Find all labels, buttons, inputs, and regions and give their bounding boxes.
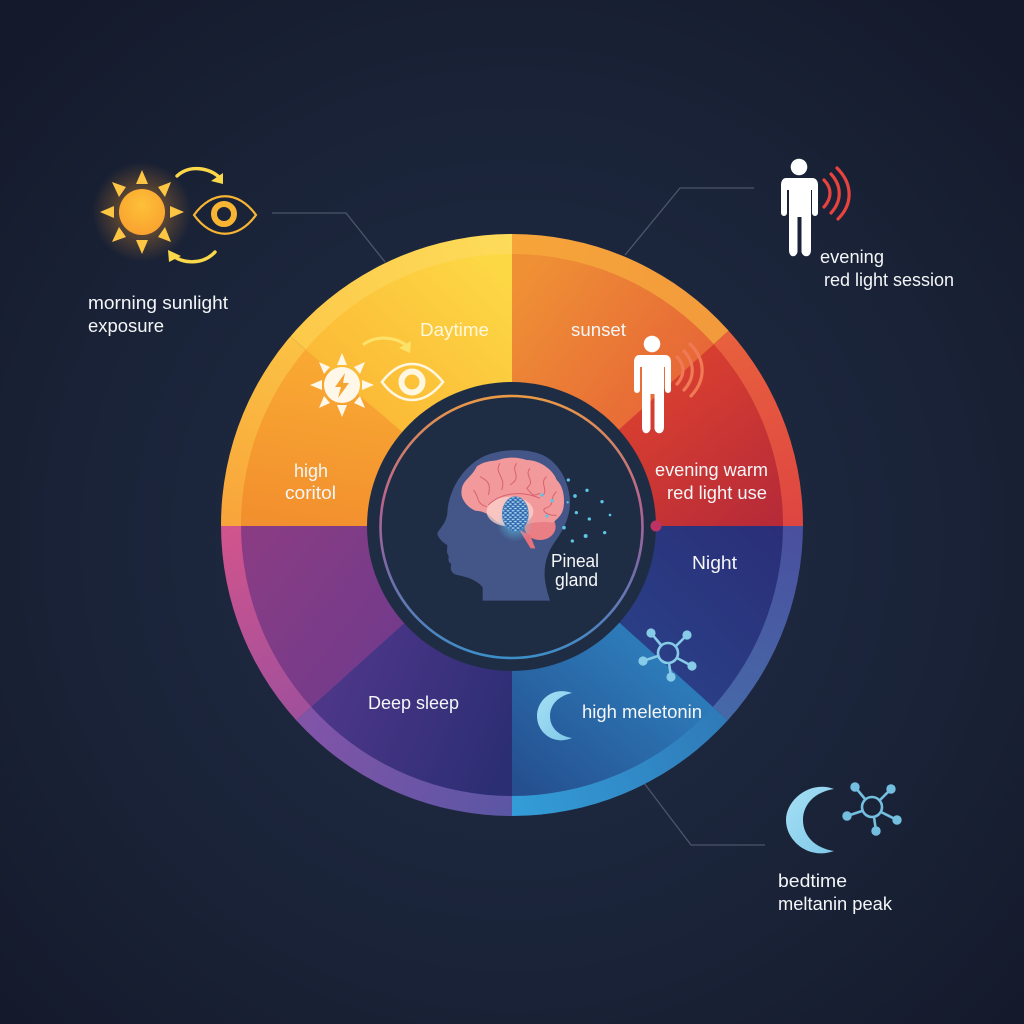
panel: high cortisol segment bbox=[241, 350, 402, 526]
label: sunset: sunset bbox=[571, 320, 626, 340]
label: evening red light session: evening bbox=[820, 247, 884, 267]
cerebellum bbox=[524, 513, 556, 540]
panel: purple sleep segment bbox=[241, 526, 404, 706]
icon: morning sun with glow bbox=[92, 162, 192, 262]
label: Pineal gland: Pineal bbox=[551, 551, 599, 571]
panel: evening red light segment bbox=[619, 344, 783, 526]
centre disc bbox=[367, 382, 656, 671]
icon: molecule in night segment bbox=[638, 628, 697, 682]
label: Pineal gland bbox=[551, 551, 599, 590]
icon: moon in melatonin segment bbox=[537, 691, 572, 740]
label: Pineal gland: gland bbox=[555, 570, 598, 590]
icon: eye in daytime bbox=[382, 364, 443, 400]
label: evening warm red light use: evening warm bbox=[655, 460, 768, 480]
panel: high melatonin segment bbox=[512, 622, 713, 796]
label: morning sunlight exposure: exposure bbox=[88, 316, 164, 336]
icon: eye, morning bbox=[194, 196, 256, 234]
circadian wheel bbox=[221, 234, 803, 816]
pineal glow bbox=[497, 505, 533, 542]
arrow: sun to eye bbox=[177, 169, 223, 184]
label: Deep sleep: Deep sleep bbox=[368, 693, 459, 713]
label: morning sunlight exposure bbox=[88, 293, 228, 336]
panel: night segment bbox=[620, 526, 783, 707]
cerebrum bbox=[461, 458, 564, 527]
label: evening red light session bbox=[820, 247, 954, 290]
melatonin particles bbox=[540, 478, 611, 543]
label: bedtime melatonin peak: bedtime bbox=[778, 871, 847, 891]
label: evening warm red light use bbox=[655, 460, 768, 503]
leader line: morning sunlight bbox=[272, 213, 385, 262]
pineal gland bbox=[502, 497, 528, 531]
label: bedtime melatonin peak bbox=[778, 871, 893, 914]
label: bedtime melatonin peak: meltanin peak bbox=[778, 894, 893, 914]
label: Night: Night bbox=[692, 553, 737, 573]
icon: sun with bolt in daytime bbox=[310, 353, 374, 417]
brain folds bbox=[473, 463, 557, 515]
head and brain illustration bbox=[437, 450, 611, 601]
icon: person with red light waves bbox=[781, 159, 849, 256]
label: Daytime: Daytime bbox=[420, 320, 489, 340]
label: evening red light session: red light session bbox=[824, 270, 954, 290]
panel: daytime segment bbox=[306, 254, 512, 432]
centre ring bbox=[380, 396, 642, 658]
label: high coritol bbox=[285, 461, 336, 503]
label: high coritol: coritol bbox=[285, 483, 336, 503]
arrow: daytime sun to eye bbox=[364, 338, 411, 353]
panel: deep sleep segment bbox=[312, 623, 512, 796]
head silhouette bbox=[437, 450, 570, 601]
label: high coritol: high bbox=[294, 461, 328, 481]
brain inner glow bbox=[487, 497, 533, 527]
label: high meletonin: high meletonin bbox=[582, 702, 702, 722]
panel: sunset segment bbox=[512, 254, 714, 430]
icon: moon and molecule, bedtime bbox=[786, 782, 902, 853]
label: morning sunlight exposure: morning sunlight bbox=[88, 293, 228, 313]
label: evening warm red light use: red light use bbox=[667, 483, 767, 503]
arrow: eye to sun bbox=[168, 250, 215, 262]
leader line: evening red light bbox=[625, 188, 754, 255]
brain stem bbox=[519, 530, 535, 548]
leader line: bedtime melatonin bbox=[644, 783, 765, 845]
outer rim segments bbox=[221, 234, 803, 816]
ring marker dot bbox=[650, 520, 662, 532]
icon: person with warm light waves bbox=[634, 336, 702, 433]
